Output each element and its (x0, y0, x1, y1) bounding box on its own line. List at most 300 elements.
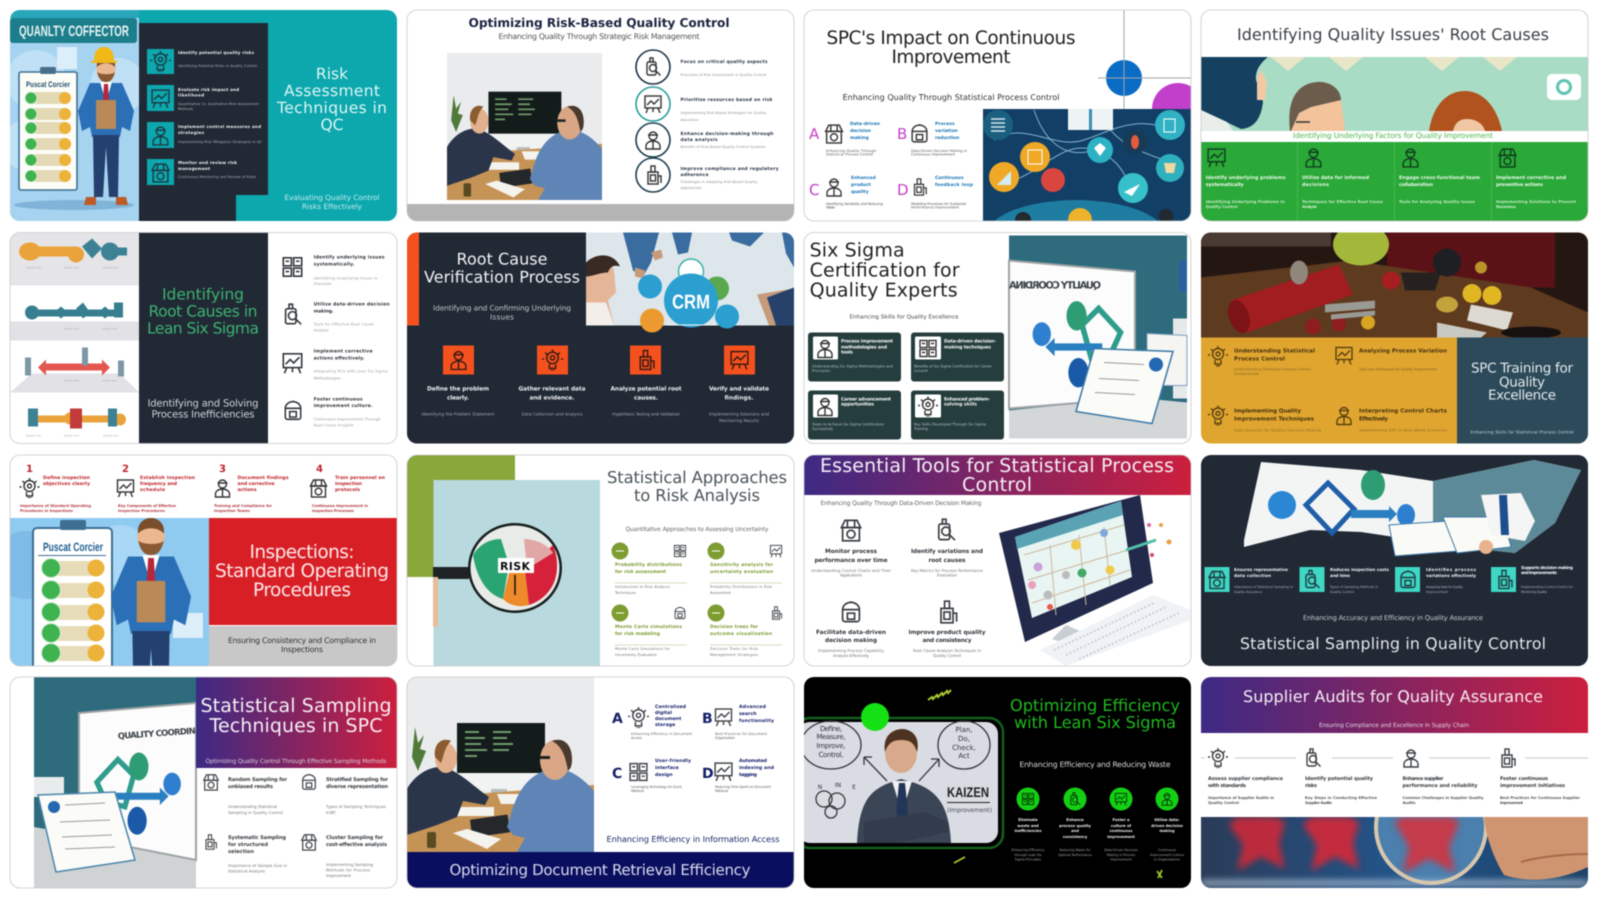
lettered features: Centralized (655, 704, 686, 710)
benefit text: in Organizations (1154, 858, 1180, 862)
lettered features (612, 704, 774, 793)
item text: Approaches (680, 186, 702, 190)
sampling items: selection (228, 849, 254, 855)
benefit text: Utilize data- (1154, 818, 1180, 822)
numbered steps: and corrective (238, 481, 274, 487)
benefit items: Identifies process (1426, 567, 1476, 572)
lettered features: B (702, 711, 713, 727)
items A-D: Waste (826, 206, 835, 210)
approach items: uncertainty evaluation (710, 569, 773, 575)
items A-D: feedback loop (935, 182, 974, 188)
benefit text (1011, 818, 1184, 862)
benefit text: waste and (1017, 824, 1039, 828)
title banner: Techniques in SPC (208, 715, 382, 737)
title banner (1201, 677, 1588, 733)
subtitle: Enhancing Efficiency and Reducing Waste (1020, 760, 1171, 769)
item text: Challenges in Adapting Risk-Based Quality (680, 180, 758, 184)
items A-D (809, 121, 974, 210)
step text: Identifying the Problem Statement (422, 412, 495, 416)
panel: Optimizing Document Retrieval Efficiency (407, 677, 794, 888)
photo: certificate and whiteboard (34, 677, 196, 888)
benefit items: Monitoring Quality (1521, 590, 1547, 594)
whiteboard words: Define, (820, 725, 842, 733)
lettered features: Automated (739, 758, 767, 764)
feature cards: Successfully (812, 427, 834, 431)
topic items: Implementing Quality (1234, 408, 1301, 414)
numbered steps: protocols (335, 487, 360, 493)
benefit text: through Lean Six (1014, 853, 1042, 857)
approach items: Assessment (710, 591, 732, 595)
title: Identifying (162, 286, 244, 304)
benefit text: Enhancing Efficiency (1011, 848, 1045, 852)
lettered features: User-friendly (655, 758, 691, 764)
feature cards: Key Skills Developed Through Six Sigma (914, 422, 986, 426)
item text: Engage cross-functional team (1399, 175, 1480, 181)
item text: preventive actions (1496, 182, 1543, 188)
tool items: performance over time (814, 557, 888, 564)
feature cards: Career advancement (841, 396, 892, 402)
step text (422, 386, 769, 423)
step timeline: Importance of Supplier Audits in (1208, 796, 1274, 800)
feature cards: Enhanced problem- (944, 396, 990, 402)
benefit text: Making in Process (1107, 853, 1136, 857)
feature cards: Steps to Achieve Six Sigma Certification (812, 422, 885, 426)
step text: clearly. (447, 394, 469, 402)
process strips: Sample item (64, 434, 80, 438)
benefit text: Data-Driven Decision (1104, 848, 1138, 852)
approach items (612, 542, 782, 657)
red title panel: Inspections: (250, 542, 354, 563)
right column items: Foster continuous (314, 396, 363, 402)
title banner: Supplier Audits for Quality Assurance (1243, 687, 1543, 706)
feature cards: Growth (914, 369, 929, 373)
approach items: Probability Distributions in Risk (710, 585, 773, 589)
approach items: Decision trees for (710, 624, 759, 630)
whiteboard words: Measure, (816, 733, 846, 741)
title: Statistical Sampling in Quality Control (1240, 634, 1546, 653)
tool items: Understanding Control Charts and Their (811, 568, 891, 573)
panel: Supplier Audits for Quality Assurance (1201, 677, 1588, 888)
subtitle: Identifying and Confirming Underlying (433, 304, 571, 312)
step timeline: Key Steps in Conducting Effective (1305, 796, 1377, 800)
process strips: Sample item (26, 266, 42, 270)
item text (680, 59, 779, 190)
benefit text: Optimal Performance (1058, 853, 1092, 857)
step text: Monitoring Results (719, 418, 759, 423)
sampling items: Cluster Sampling for (326, 835, 383, 841)
panel: Optimizing Risk-Based Quality Control (407, 10, 794, 221)
sampling items: Statistical Analysis (228, 868, 265, 874)
title: Excellence (1488, 388, 1556, 404)
benefit items: Improvement (1426, 590, 1449, 594)
items A-D: Enhanced (851, 175, 876, 181)
grey subtitle panel (209, 626, 397, 666)
numbered steps: schedule (140, 487, 165, 493)
tool items (811, 519, 986, 658)
feature cards: Data-driven decision- (944, 338, 996, 344)
item text: Identifying Underlying Problems in (1206, 199, 1285, 204)
items A-D: Identifying Variability and Reducing (826, 202, 883, 206)
title banner: Statistical Sampling (200, 695, 392, 717)
title banner: Essential Tools for Statistical Process (820, 455, 1174, 477)
benefit text: process quality (1059, 824, 1091, 828)
title: Statistical Approaches (607, 468, 787, 487)
items A-D: Data-Driven Decision Making in (911, 149, 967, 153)
right column items (283, 254, 390, 428)
title: Lean Six Sigma (147, 320, 259, 338)
subtitle: Quantitative Approaches to Assessing Uncertainty (626, 526, 769, 533)
benefit text: making (1159, 829, 1175, 833)
step timeline: Quality Control (1208, 801, 1239, 805)
step text: Implementing Solutions and (709, 412, 769, 416)
tool items: Key Metrics for Process Performance (911, 568, 984, 573)
benefit items: variations effectively (1426, 573, 1476, 578)
header badge (10, 18, 137, 43)
title (1471, 360, 1573, 404)
step text: Data Collection and Analysis (522, 412, 582, 416)
board heading: QUALITY COORDIN (118, 727, 196, 742)
items A-D: Continuous (935, 175, 964, 181)
title (607, 468, 787, 505)
lettered features: Reducing Time Spent on Document (715, 785, 772, 789)
topic items: Fundamentals (1234, 371, 1259, 376)
tool items: Quality Control (933, 653, 961, 658)
item text: Monitor and review risk (178, 160, 237, 165)
approach items: Decision Trees for Risk (710, 647, 759, 651)
lettered features: interface (655, 765, 679, 771)
items A-D: C (809, 181, 819, 199)
title banner: Ensuring Compliance and Excellence in Supply Chain (1319, 722, 1469, 729)
title (147, 286, 259, 338)
lettered features: Retrieval (715, 789, 728, 793)
numbered steps: Train personnel on (335, 475, 385, 481)
numbered steps: 1 (26, 464, 33, 475)
numbered steps: Continuous Improvement in (312, 504, 368, 508)
sampling items: unbiased results (228, 784, 273, 790)
approach items: Management Strategies (710, 653, 758, 657)
lettered features: Organization (715, 736, 735, 740)
item text: Tools for Analyzing Quality Issues (1399, 199, 1476, 204)
approach items: Uncertainty Evaluation (615, 653, 658, 657)
subtitle (433, 304, 571, 322)
red title panel: Procedures (253, 580, 351, 601)
green dot and accents (861, 690, 1162, 878)
right column items: making. (314, 308, 334, 314)
item text: Utilize data for informed (1302, 175, 1370, 181)
panel: Statistical Sampling in Quality Control (1201, 455, 1588, 666)
tool items: Evaluation (937, 572, 957, 578)
item text: adherence (680, 172, 708, 178)
sampling items: Types of Sampling Techniques (325, 804, 386, 809)
step text: findings. (724, 394, 754, 402)
tool items: root causes (928, 557, 966, 564)
tool items: Applications (840, 572, 862, 578)
mirrored board heading: QUALITY COORDINA (1009, 280, 1101, 292)
title: Quality (1499, 374, 1545, 390)
step timeline: improvement initiatives (1500, 783, 1565, 789)
item text: Assurance (680, 118, 698, 122)
whiteboard words: Act (958, 752, 970, 760)
step text: and evidence. (530, 394, 574, 402)
topic items: Understanding Statistical (1234, 348, 1315, 354)
process strips: Sample item (64, 328, 80, 330)
feature cards: making techniques (944, 344, 991, 350)
benefit text: Improvement (1110, 858, 1132, 862)
photo: CRM team (586, 232, 794, 332)
step timeline: Improvement (1500, 801, 1523, 805)
whiteboard words: IN (835, 782, 841, 789)
risk label: RISK (500, 560, 530, 573)
title (826, 28, 1076, 68)
right column items: Analysis (314, 328, 329, 332)
right column items: Methodologies (314, 376, 341, 380)
process strips: Sample item (102, 328, 118, 330)
panel: Statistical Sampling Techniques in SPC (10, 677, 397, 888)
panel: Optimizing Efficiency with Lean Six Sigma (796, 677, 1191, 888)
step text: Verify and validate (709, 386, 769, 392)
right column items: Implement corrective (314, 348, 373, 354)
item text: collaboration (1399, 182, 1434, 188)
process strips: Sample item (103, 266, 119, 270)
tool items: Root Cause Analysis Techniques in (913, 648, 981, 653)
item text: Analysis (1302, 204, 1318, 209)
benefit items: Quality Control (1330, 590, 1354, 594)
sampling items: diverse representation (326, 784, 388, 790)
feature cards: Principles (812, 369, 830, 373)
checklist clipboard: Puscat Corcier (26, 80, 70, 89)
sampling items: Systematic Sampling (228, 835, 286, 841)
items A-D: Continuous Improvement (911, 152, 956, 156)
feature cards: opportunities (841, 402, 874, 408)
item text: Enhance decision-making through (680, 131, 774, 137)
title (1010, 696, 1180, 732)
step text: Gather relevant data (518, 386, 586, 392)
items A-D: Enhancing Quality Through (826, 149, 876, 153)
numbered steps: Inspection Processes (312, 509, 355, 513)
benefit text: Sigma Principles (1015, 858, 1041, 862)
item text: Implement control measures and (178, 124, 261, 129)
step timeline: performance and reliability (1402, 783, 1478, 789)
step timeline: Identify potential quality (1305, 776, 1374, 782)
subtitle: Enhancing Skills for Statistical Process Control (1470, 430, 1574, 434)
feature cards: Understanding Six Sigma Methodologies and (812, 364, 893, 368)
whiteboard words (816, 725, 976, 791)
sampling items: Sampling in Quality Control (228, 810, 283, 815)
panel: SPC Training for Quality Excellence (1201, 224, 1588, 444)
item text: data analysis (680, 137, 718, 143)
benefit text: and (1071, 829, 1079, 833)
illustration: inspector with clipboard (0, 518, 209, 731)
right column items: systematically. (314, 262, 355, 268)
items A-D: D (897, 181, 909, 199)
step text: Hypothesis Testing and Validation (612, 412, 680, 416)
panel: Risk Assessment Techniques in QC (2, 10, 397, 221)
items A-D: product (851, 182, 872, 188)
title: Techniques in (276, 99, 387, 117)
title banner: Control (962, 474, 1032, 496)
item text: systematically (1206, 182, 1244, 188)
panel: Statistical Approaches to Risk Analysis (407, 455, 794, 666)
item text: Identify underlying problems (1206, 175, 1286, 181)
whiteboard words: Improve, (816, 742, 846, 750)
benefit items: Analyzing Data for Quality (1426, 585, 1463, 589)
feature cards (808, 332, 1004, 440)
sampling items: Importance of Sample Size in (228, 863, 287, 868)
numbered steps: Procedures in Inspections (20, 509, 74, 513)
item text: Identify potential quality risks (178, 50, 255, 55)
caption: Enhancing Efficiency in Information Access (606, 834, 780, 844)
benefit text: inefficiencies (1014, 829, 1042, 833)
item text: decisions (1302, 182, 1329, 188)
panel: Root Cause Verification Process (407, 232, 794, 444)
sampling items: in SPC (326, 810, 336, 815)
item text: Methods (178, 107, 193, 111)
item text: Principles of Risk Assessment in Quality Control (680, 73, 767, 77)
title: with Lean Six Sigma (1014, 713, 1176, 732)
sampling items: Implementing Sampling (326, 862, 373, 867)
sampling items: Random Sampling for (228, 777, 287, 783)
title (276, 65, 387, 134)
lettered features: D (702, 766, 714, 782)
lettered features: Access (631, 736, 642, 740)
benefit items: and time (1330, 573, 1350, 578)
whiteboard words: N (818, 784, 822, 791)
sampling items: Stratified Sampling for (326, 777, 388, 783)
title: Risk (316, 65, 348, 83)
photo: meeting at monitor (407, 677, 594, 852)
benefit items: Quality Assurance (1234, 590, 1262, 594)
benefit text: Reducing Waste for (1060, 848, 1091, 852)
process strips: Sample item (64, 380, 80, 382)
topic items: Data Analysis for Quality Decision Making (1234, 428, 1322, 432)
benefit items: data collection (1234, 573, 1271, 578)
sampling items: Understanding Statistical (228, 804, 277, 809)
approach items: for risk modeling (615, 631, 660, 637)
numbered steps: Document findings (238, 475, 289, 481)
subtitle: Enhancing Accuracy and Efficiency in Quality Assurance (1303, 614, 1483, 622)
subtitle: Issues (490, 312, 514, 322)
feature cards: solving skills (944, 402, 977, 408)
item text: Improve compliance and regulatory (680, 166, 779, 172)
subtitle: Risks Effectively (302, 202, 363, 211)
lettered features: Leveraging Technology for Quick (631, 785, 683, 789)
title: Root Cause (456, 250, 548, 268)
icon squares (443, 346, 755, 374)
title: Six Sigma (810, 240, 905, 262)
item text: Continuous Monitoring and Review of Risks (178, 175, 256, 179)
panel: Six Sigma Certification for Quality Experts (804, 232, 1191, 444)
items A-D: variation (935, 128, 958, 134)
whiteboard words: Check, (952, 744, 976, 752)
title: QC (320, 116, 344, 134)
items A-D: Data-driven (850, 121, 880, 127)
title banner: Optimizing Quality Control Through Effective Sampling Methods (206, 758, 386, 765)
decorative circles and lines (1098, 10, 1192, 110)
illustration: quality inspector with checklist (2, 10, 146, 221)
whiteboard words: Plan, (955, 726, 973, 734)
approach items: Probability distributions (615, 562, 682, 568)
item text: strategies (178, 130, 205, 135)
right column items: actions effectively. (314, 356, 365, 362)
topic items: Interpreting Control Charts (1359, 408, 1448, 414)
title banner (196, 677, 397, 768)
benefit items: and improvements (1521, 570, 1558, 575)
lettered features: document (655, 716, 682, 722)
numbered steps: inspection (335, 481, 362, 487)
numbered steps (10, 455, 397, 518)
item text: Implementing Risk-Based Strategies for Quality (680, 111, 766, 115)
title: Verification Process (424, 268, 580, 286)
step text: Analyze potential root (610, 386, 682, 392)
title: Identifying Quality Issues' Root Causes (1237, 25, 1549, 44)
process strips: Sample item (26, 434, 42, 438)
approach items: outcome visualization (710, 631, 772, 637)
tool items: and consistency (922, 637, 972, 644)
items A-D: decision (850, 128, 871, 134)
step timeline: Foster continuous (1500, 776, 1548, 782)
benefit items: Reduces inspection costs (1330, 567, 1390, 572)
icons (1208, 149, 1516, 167)
title: Assessment (284, 82, 380, 100)
topic items: Tools and Techniques for Quality Improvement (1358, 366, 1438, 372)
numbered steps: Importance of Standard Operating (20, 504, 91, 508)
photo: meeting at monitor (447, 53, 602, 200)
photo: Kaizen presenter: KAIZEN (947, 784, 989, 800)
topic items: Process Control (1234, 356, 1285, 362)
item text: Recurrence (1496, 204, 1516, 209)
tool items: Monitor process (825, 548, 878, 555)
lettered features: Best Practices for Document (715, 732, 768, 736)
right column items: Processes (314, 281, 332, 286)
step timeline: Best Practices for Continuous Supplier (1500, 796, 1580, 800)
whiteboard words: Do, (958, 735, 970, 743)
header badge: QUANLTY COFFECTOR (19, 23, 129, 40)
feature cards: Process improvement (841, 338, 894, 344)
title: Root Causes in (148, 302, 258, 320)
benefit text: Eliminate (1018, 818, 1038, 822)
photo: certificate and whiteboard (1009, 236, 1187, 438)
step timeline: Common Challenges in Supplier Quality (1402, 796, 1484, 800)
subtitle: Evaluating Quality Control (284, 193, 380, 202)
numbered steps: Training and Compliance for (214, 504, 272, 508)
item text: Prioritize resources based on risk (680, 97, 774, 103)
step timeline: Assess supplier compliance (1208, 776, 1284, 782)
step text: Define the problem (427, 386, 489, 392)
right column items: Identify underlying issues (314, 254, 385, 260)
process strips: Sample item (103, 434, 119, 438)
photo: Kaizen presenter: (Improvement) (947, 807, 992, 814)
brush-masked photo (1244, 460, 1581, 556)
process strips (10, 232, 139, 438)
lettered features: indexing and (739, 765, 774, 771)
step timeline: risks (1305, 783, 1317, 789)
benefit text: improvement (1107, 835, 1135, 839)
photo: network collage (982, 108, 1192, 222)
grey subtitle panel: Inspections (281, 645, 323, 654)
right column items: Root Cause Insights (314, 422, 354, 428)
lettered features: design (655, 772, 673, 778)
numbered steps: frequency and (140, 481, 177, 487)
subtitle: Enhancing Quality Through Statistical Process Control (842, 93, 1060, 102)
red title panel: Standard Operating (215, 561, 389, 582)
tool items: decision making (825, 637, 877, 644)
photo: tools on wood table (1201, 224, 1588, 338)
subtitle: Enhancing Quality Through Strategic Risk Management (498, 32, 700, 41)
sampling items (204, 774, 388, 878)
icon circles (1016, 788, 1178, 810)
item text (178, 50, 263, 179)
approach items: Techniques (614, 591, 636, 595)
